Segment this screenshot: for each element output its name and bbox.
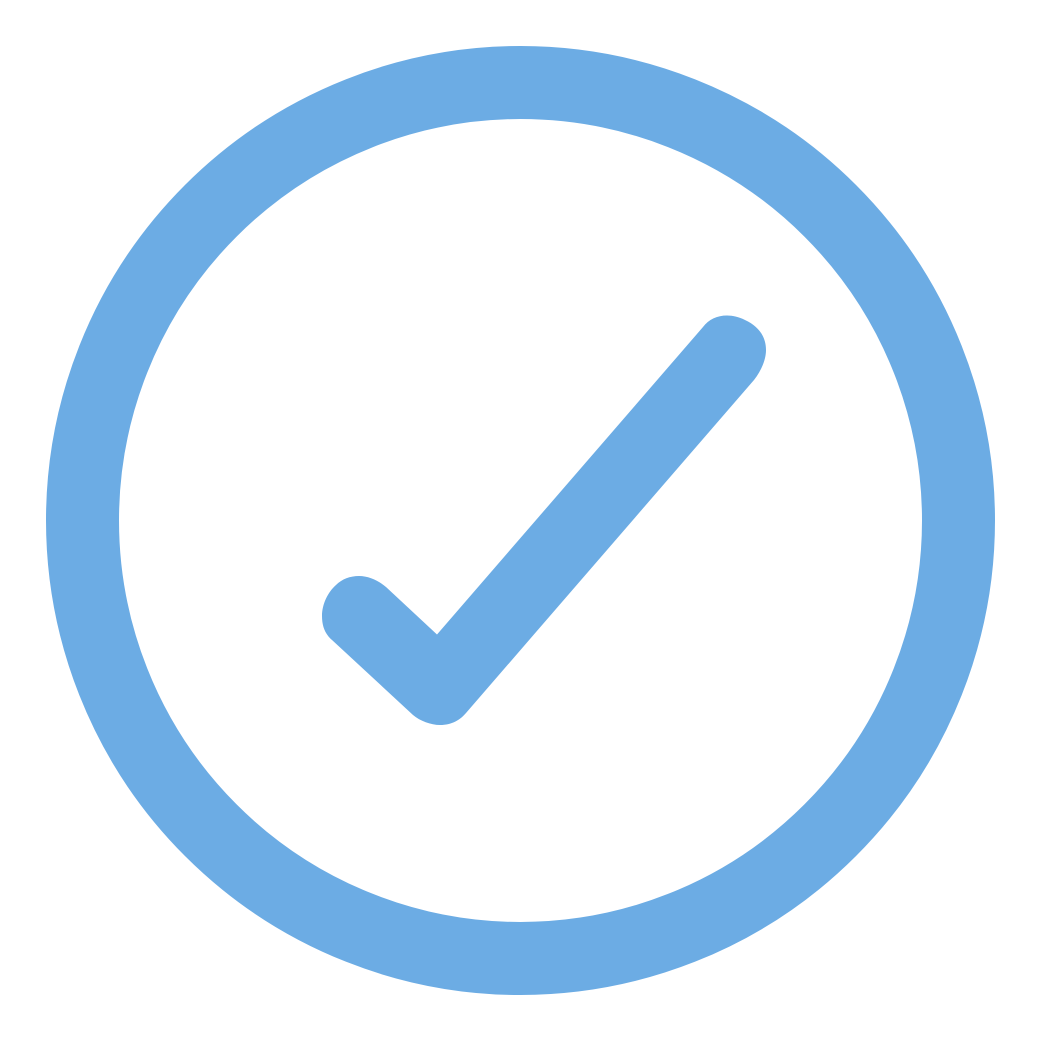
icon: circle ring	[82, 82, 958, 958]
icon: check mark	[322, 316, 766, 725]
